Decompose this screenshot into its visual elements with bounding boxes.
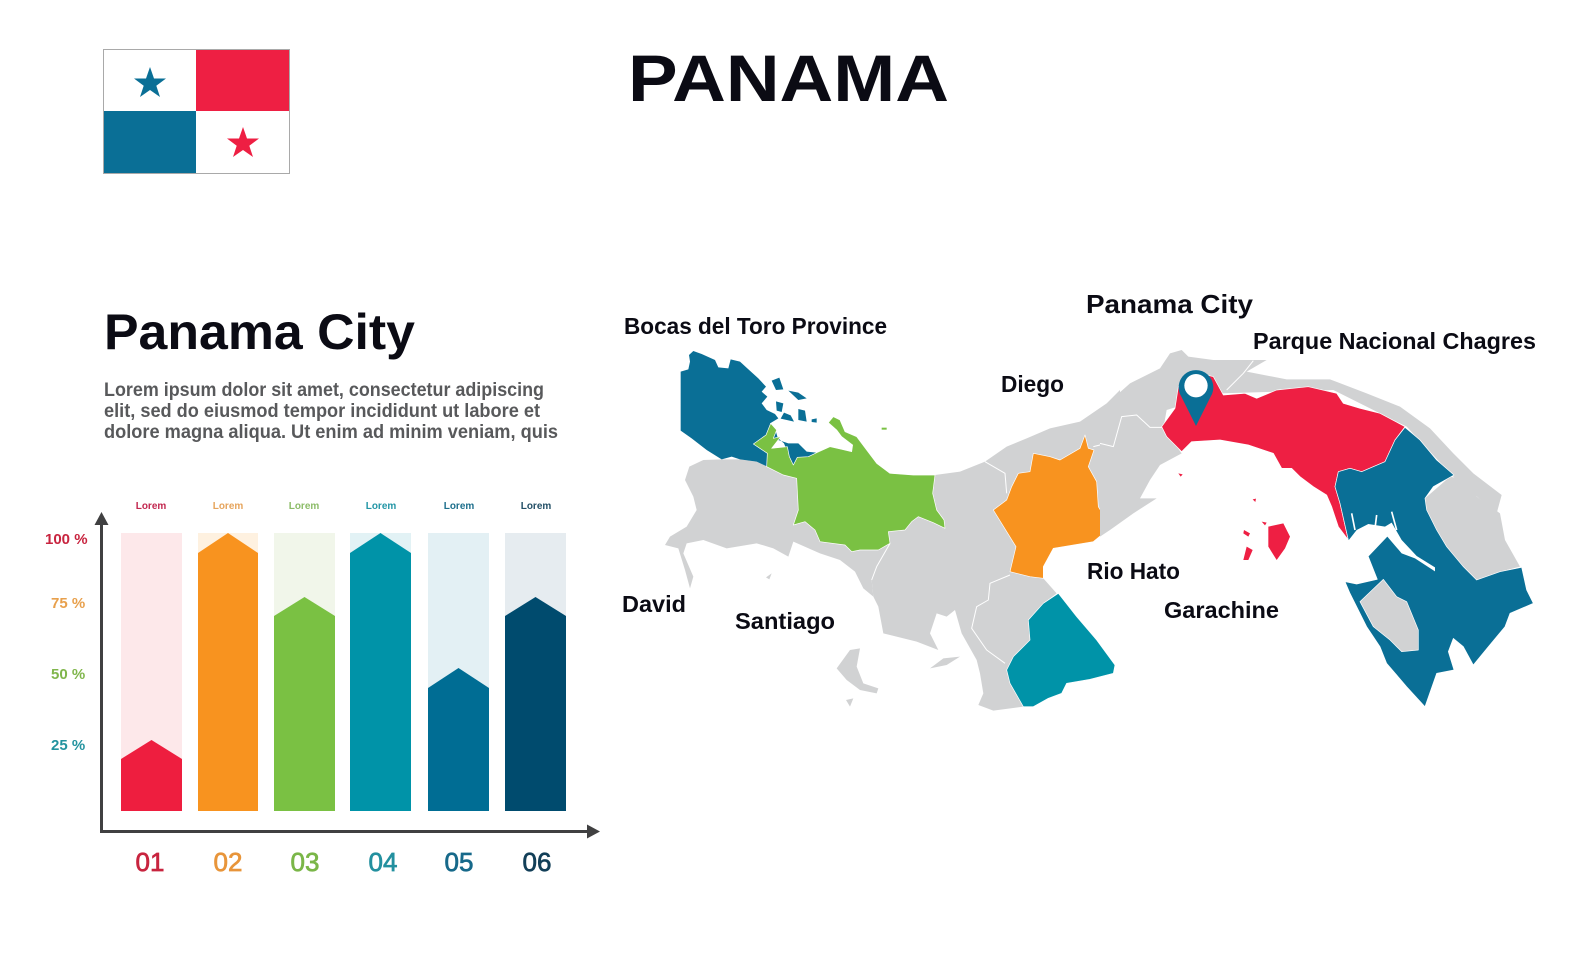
bar 02 (198, 533, 258, 811)
region: inner gray (1360, 579, 1418, 652)
label: Bocas del Toro Province: Bocas del Toro Province (624, 313, 887, 339)
percentage labels: 100 % (45, 531, 88, 548)
region: north coast gray (1100, 350, 1502, 537)
percentage labels: 75 % (51, 595, 85, 612)
percentage labels: 25 % (51, 737, 85, 754)
bar 03 (274, 533, 335, 811)
category numbers: 04 (369, 847, 397, 877)
column labels: Lorem (213, 501, 243, 512)
region: Los Santos teal (1007, 593, 1115, 707)
percentage labels (45, 531, 88, 754)
category numbers: 05 (445, 847, 473, 877)
column labels (136, 501, 551, 512)
category numbers: 02 (214, 847, 242, 877)
flag of Panama (103, 49, 290, 174)
text block: lorem ipsum: dolore magna aliqua. Ut enim ad minim veniam, quis (104, 422, 558, 443)
category numbers: 01 (136, 847, 164, 877)
text block: lorem ipsum: Lorem ipsum dolor sit amet, consectetur adipiscing (104, 380, 544, 401)
region: western gray (665, 459, 890, 597)
icon: location pin (1179, 370, 1213, 426)
map: eastern regions (1100, 350, 1533, 707)
region boundaries (872, 443, 1120, 663)
Gulf of San Miguel (1348, 523, 1435, 571)
bar 04 (350, 533, 411, 811)
map: western and central regions (665, 351, 1120, 711)
column labels: Lorem (289, 501, 319, 512)
bar chart (45, 501, 600, 877)
region: central gray (872, 390, 1120, 711)
category numbers (136, 847, 551, 877)
label: Santiago: Santiago (735, 608, 835, 634)
bar 06 (505, 533, 566, 811)
label: Parque Nacional Chagres: Parque Nacional Chagres (1253, 328, 1536, 354)
bar 01 (121, 533, 182, 811)
river inlets (1352, 512, 1397, 530)
region: gray islands (766, 573, 960, 707)
small green island (882, 428, 887, 430)
heading: Panama City: Panama City (104, 304, 415, 360)
region: Ngabe green (753, 417, 945, 552)
label: David: David (622, 591, 686, 617)
text block: lorem ipsum: elit, sed do eiusmod tempor incididunt ut labore et (104, 401, 541, 422)
label: Garachine: Garachine (1164, 597, 1279, 623)
region boundaries (1100, 361, 1253, 447)
column labels: Lorem (136, 501, 166, 512)
label: Rio Hato: Rio Hato (1087, 558, 1180, 584)
Bocas islands (772, 378, 817, 423)
bar 05 (428, 533, 489, 811)
Pearl Islands red (1178, 473, 1290, 560)
region: Cocle orange (993, 435, 1111, 578)
map labels (622, 289, 1536, 634)
label: Diego: Diego (1001, 371, 1064, 397)
category numbers: 06 (523, 847, 551, 877)
region: Bocas del Toro blue (681, 351, 816, 467)
region: Panama province red (1162, 373, 1405, 540)
column labels: Lorem (444, 501, 474, 512)
column labels: Lorem (366, 501, 396, 512)
category numbers: 03 (291, 847, 319, 877)
title: PANAMA (628, 41, 949, 115)
region: Darien blue (1335, 427, 1533, 707)
percentage labels: 50 % (51, 666, 85, 683)
column labels: Lorem (521, 501, 551, 512)
label: Panama City: Panama City (1086, 289, 1254, 319)
map of Panama (665, 350, 1533, 711)
axes (94, 512, 600, 838)
region: eastern gray (1425, 477, 1520, 580)
text block: lorem ipsum (104, 380, 558, 443)
